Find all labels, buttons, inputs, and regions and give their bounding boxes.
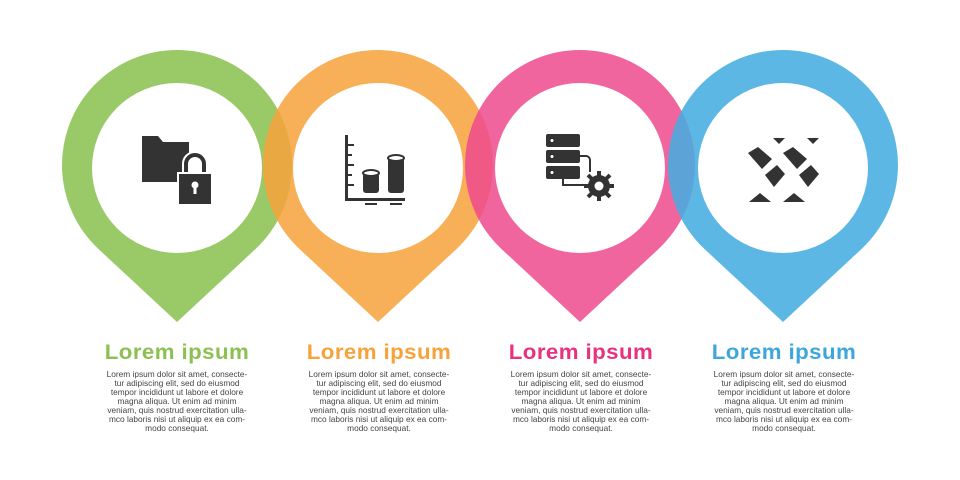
text block: orange: mco laboris nisi ut aliquip ex ea com- — [311, 414, 447, 424]
white circles — [92, 83, 868, 253]
icon: server gear — [546, 134, 614, 201]
text block: blue: tempor incididunt ut labore et dolore — [718, 387, 850, 397]
text block: orange: veniam, quis nostrud exercitation ulla- — [309, 405, 449, 415]
icon: folder lock — [142, 136, 215, 206]
text block: green: tempor incididunt ut labore et dolore — [111, 387, 243, 397]
text block: orange — [307, 341, 451, 433]
icon: bar chart — [345, 135, 405, 205]
text block: green — [105, 341, 249, 433]
text block: pink — [509, 341, 653, 433]
text block: pink: modo consequat. — [549, 423, 613, 433]
text block: blue: Lorem ipsum — [712, 341, 856, 364]
text block: pink: tempor incididunt ut labore et dolore — [515, 387, 647, 397]
text block: green: magna aliqua. Ut enim ad minim — [118, 396, 236, 406]
text block: green: veniam, quis nostrud exercitation ulla- — [107, 405, 247, 415]
text block: orange: Lorem ipsum — [307, 341, 451, 364]
text block: blue: modo consequat. — [752, 423, 816, 433]
text block: pink: veniam, quis nostrud exercitation ulla- — [511, 405, 651, 415]
text block: blue: veniam, quis nostrud exercitation ulla- — [714, 405, 854, 415]
text block: blue: magna aliqua. Ut enim ad minim — [724, 396, 843, 406]
text block: pink: magna aliqua. Ut enim ad minim — [522, 396, 640, 406]
text block: green: modo consequat. — [145, 423, 209, 433]
text block: pink: Lorem ipsum dolor sit amet, consecte- — [511, 369, 651, 379]
text block: pink: mco laboris nisi ut aliquip ex ea com- — [513, 414, 649, 424]
pin: blue — [668, 50, 898, 322]
text block: orange: modo consequat. — [347, 423, 411, 433]
pin: orange — [263, 50, 493, 322]
icon: footprints — [748, 138, 819, 202]
text block: blue: Lorem ipsum dolor sit amet, consecte- — [714, 369, 854, 379]
text block: pink: Lorem ipsum — [509, 341, 653, 364]
text block: orange: tur adipiscing elit, sed do eiusmod — [316, 378, 441, 388]
text block: blue — [712, 341, 856, 433]
pin: green — [62, 50, 292, 322]
text block: green: tur adipiscing elit, sed do eiusmod — [114, 378, 239, 388]
pin: pink — [465, 50, 695, 322]
text block: blue: mco laboris nisi ut aliquip ex ea com- — [716, 414, 852, 424]
text block: orange: magna aliqua. Ut enim ad minim — [320, 396, 438, 406]
text block: blue: tur adipiscing elit, sed do eiusmod — [722, 378, 846, 388]
text block: green: mco laboris nisi ut aliquip ex ea com- — [109, 414, 245, 424]
text block: orange: tempor incididunt ut labore et dolore — [313, 387, 445, 397]
text block: green: Lorem ipsum dolor sit amet, consecte- — [107, 369, 247, 379]
text block: pink: tur adipiscing elit, sed do eiusmod — [518, 378, 643, 388]
text block: orange: Lorem ipsum dolor sit amet, consecte- — [309, 369, 449, 379]
text block: green: Lorem ipsum — [105, 341, 249, 364]
